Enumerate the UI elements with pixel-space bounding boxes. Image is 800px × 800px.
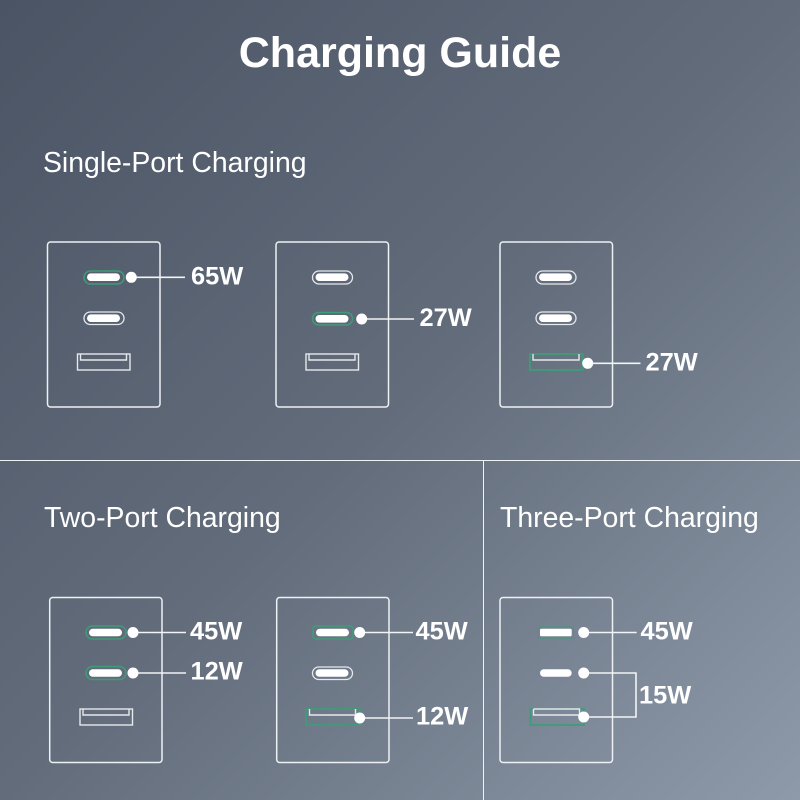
panel: single-port, USB-A 27W <box>500 242 698 407</box>
panel: three-port 45W and shared 15W: 15W <box>639 682 691 710</box>
heading: three-port charging: Three-Port Charging <box>500 502 759 534</box>
panel: single-port, USB-A 27W: 27W <box>646 348 698 376</box>
panel: two-port, USB-C 45W and USB-A 12W: 45W <box>416 618 468 646</box>
panel: three-port 45W and shared 15W <box>500 598 693 762</box>
title: Charging Guide <box>239 29 561 77</box>
panel: two-port, both USB-C 45W and 12W <box>50 598 243 762</box>
heading: two-port charging: Two-Port Charging <box>44 502 281 534</box>
panel: two-port, both USB-C 45W and 12W: 45W <box>190 618 242 646</box>
panel: three-port 45W and shared 15W: 45W <box>640 618 693 646</box>
panel: single-port, top USB-C 65W <box>48 242 243 407</box>
panel: two-port, both USB-C 45W and 12W: 12W <box>190 658 243 686</box>
panel: two-port, USB-C 45W and USB-A 12W <box>277 598 468 762</box>
panel: two-port, USB-C 45W and USB-A 12W: 12W <box>416 702 468 730</box>
heading: single-port charging: Single-Port Charging <box>43 147 307 179</box>
panel: single-port, middle USB-C 27W <box>276 242 472 407</box>
panel: single-port, middle USB-C 27W: 27W <box>420 304 472 332</box>
panel: single-port, top USB-C 65W: 65W <box>191 262 243 290</box>
